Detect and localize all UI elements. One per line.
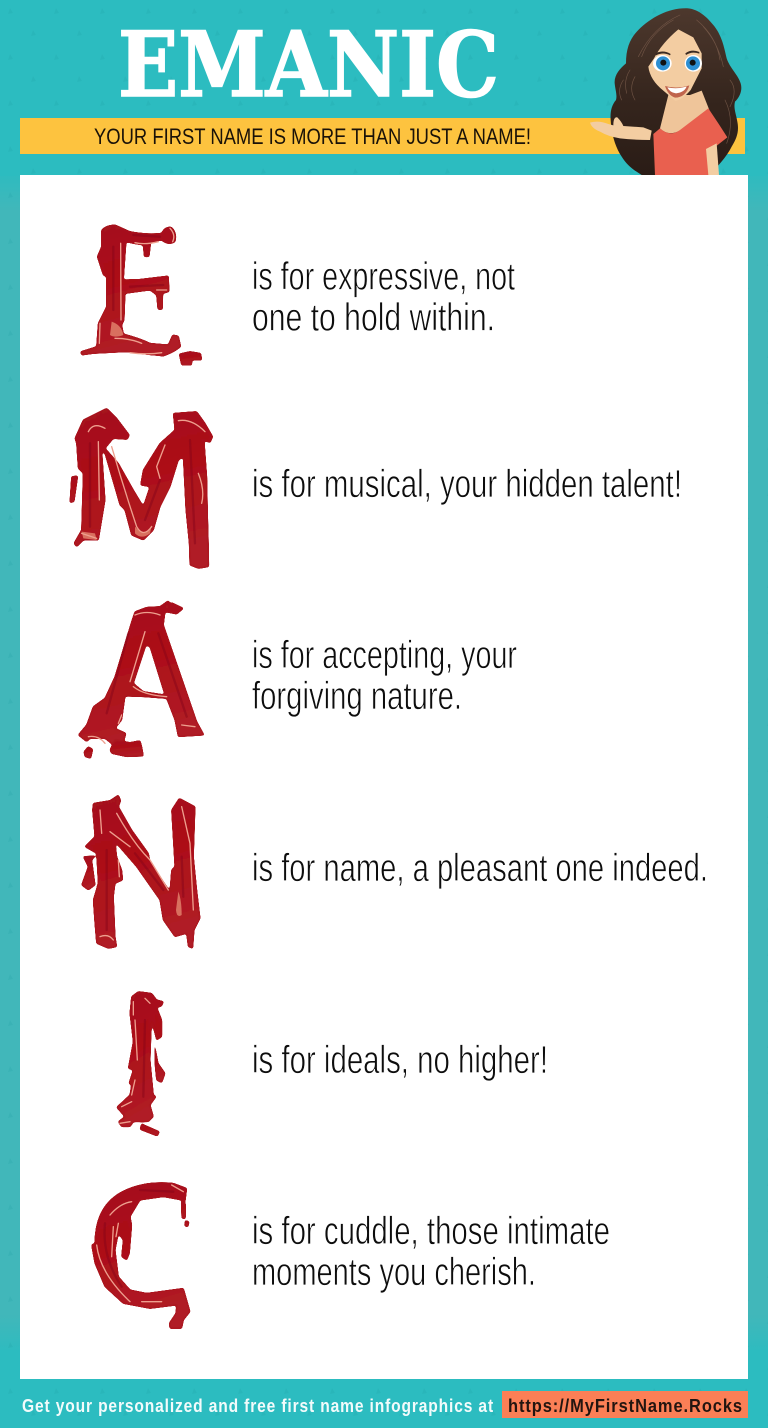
footer url badge: https://MyFirstName.Rocks (508, 1396, 743, 1416)
row: C (92, 1183, 610, 1328)
arms (590, 117, 652, 140)
face (648, 29, 702, 101)
eyes (653, 51, 702, 72)
content panel (20, 175, 748, 1379)
text E (252, 256, 515, 340)
row: I (117, 992, 548, 1136)
letter E (81, 225, 202, 365)
row: M (70, 408, 682, 568)
letter A (78, 601, 204, 758)
letter C (92, 1183, 190, 1328)
row: A (78, 601, 517, 758)
text A: is for accepting, your (252, 634, 517, 677)
shirt (653, 108, 727, 175)
tagline: YOUR FIRST NAME IS MORE THAN JUST A NAME! (94, 124, 531, 149)
letter M (70, 408, 213, 568)
smile (665, 85, 689, 98)
title: EMANIC (118, 11, 499, 117)
banner (20, 118, 745, 154)
footer call to action: Get your personalized and free first name infographics at (22, 1396, 494, 1416)
text E: one to hold within. (252, 296, 495, 340)
letter N (82, 795, 200, 948)
text E: is for expressive, not (252, 256, 515, 298)
text C: is for cuddle, those intimate (252, 1210, 610, 1253)
text A (252, 634, 517, 718)
text C (252, 1210, 610, 1294)
row: E (81, 225, 515, 365)
letter I (117, 992, 165, 1136)
row: N (82, 795, 708, 948)
footer url badge (502, 1391, 748, 1418)
text I: is for ideals, no higher! (252, 1039, 548, 1082)
illustration: woman presenting (590, 8, 741, 175)
text A: forgiving nature. (252, 675, 462, 718)
text C: moments you cherish. (252, 1251, 536, 1294)
neck (660, 91, 709, 133)
